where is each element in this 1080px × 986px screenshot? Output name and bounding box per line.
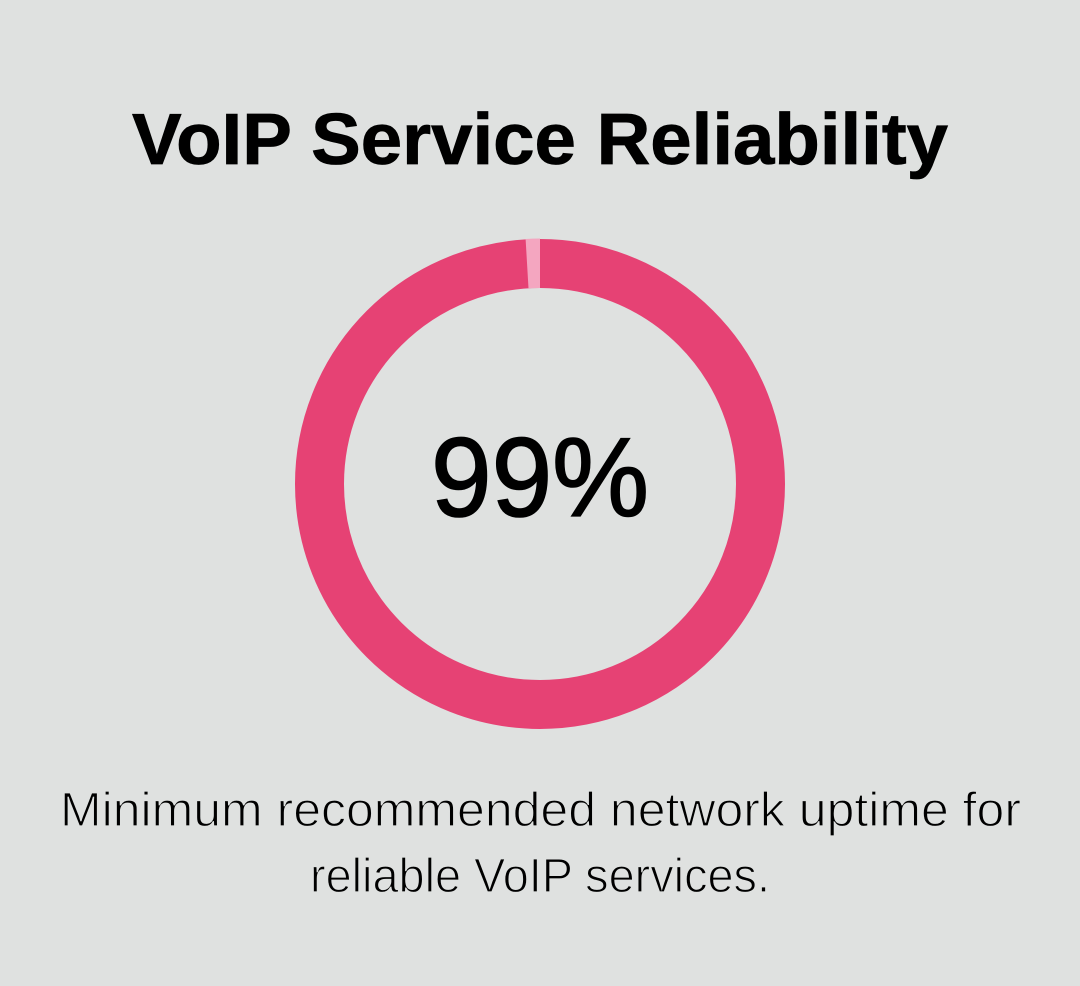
caption line 2: reliable VoIP services.: [310, 850, 770, 903]
donut remainder segment: [526, 238, 540, 288]
title: VoIP Service Reliability: [132, 100, 948, 180]
caption line 1: Minimum recommended network uptime for: [60, 784, 1021, 837]
caption: [60, 784, 1021, 903]
donut value segment: [320, 264, 760, 704]
donut chart: 99 percent: [320, 238, 760, 704]
center value: 99%: [431, 415, 649, 540]
